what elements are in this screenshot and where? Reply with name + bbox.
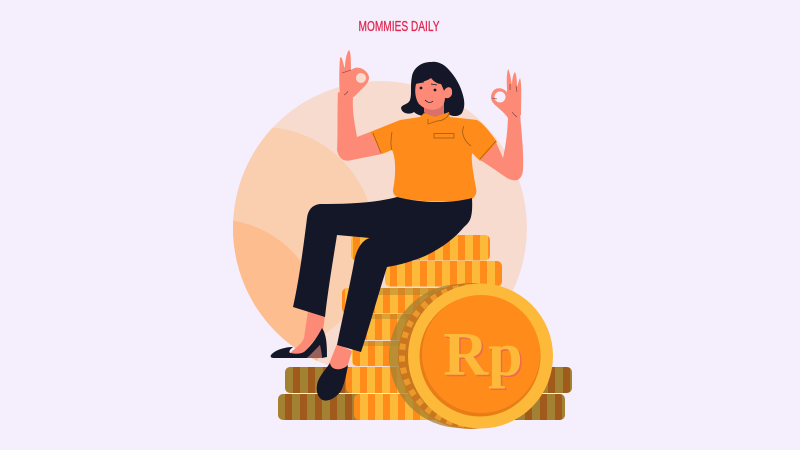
Rp label shadow: Rp bbox=[445, 322, 524, 390]
woman figure bbox=[271, 50, 523, 401]
neck bbox=[424, 100, 444, 120]
black trousers bbox=[293, 197, 472, 352]
golden coin stack bbox=[342, 235, 502, 420]
left arm and hand bbox=[337, 50, 382, 161]
shirt details bbox=[373, 113, 496, 159]
right arm and hand bbox=[480, 69, 523, 180]
Rp label: Rp bbox=[443, 321, 523, 389]
near leg skin and shoe bbox=[317, 344, 352, 401]
background circle bbox=[233, 81, 527, 367]
dark coin stacks at the back bbox=[278, 367, 572, 420]
big Rp coin bbox=[389, 283, 553, 429]
hair bbox=[401, 62, 464, 116]
title: Mommies Daily: MOMMIES DAILY bbox=[358, 18, 440, 35]
orange shirt bbox=[370, 112, 497, 202]
face bbox=[415, 78, 452, 110]
far leg skin and shoe bbox=[271, 311, 327, 358]
facial features bbox=[418, 82, 437, 102]
illustration: woman sitting on rupiah coins bbox=[233, 20, 572, 429]
